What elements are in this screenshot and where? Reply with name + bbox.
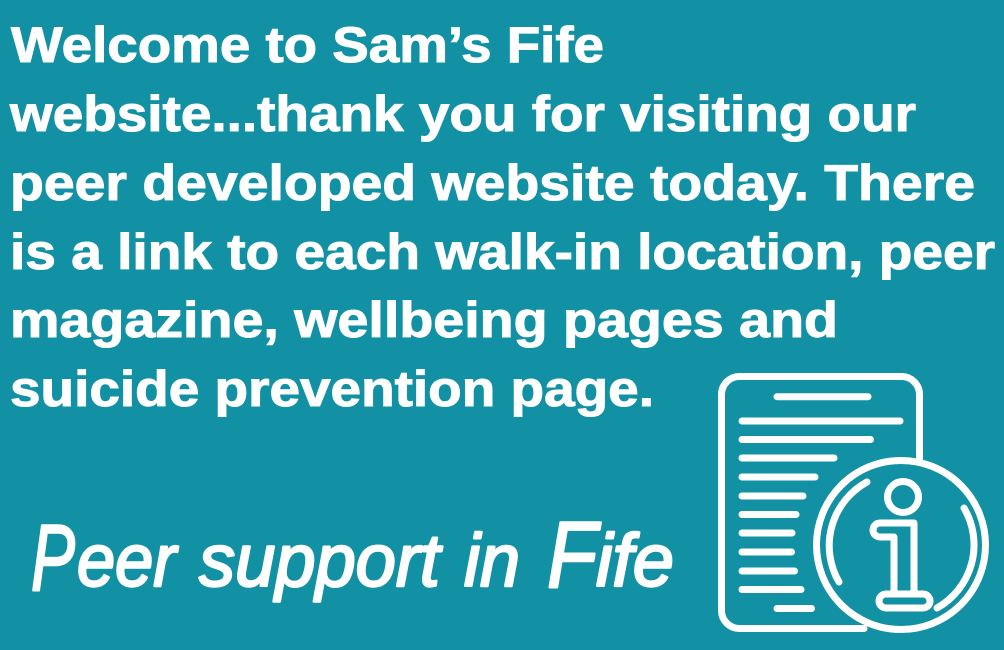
welcome message text block: peer developed website today. There [10, 155, 975, 211]
icon: document outline [722, 376, 920, 628]
icon: letter i dot [888, 482, 918, 512]
welcome message text block: Welcome to Sam’s Fife [11, 17, 604, 73]
icon: inner circle left arc [829, 482, 867, 582]
handwritten tagline [31, 502, 674, 610]
welcome message text block: is a link to each walk-in location, peer [10, 224, 995, 280]
icon: document text lines [742, 397, 900, 608]
icon: info circle [816, 460, 986, 630]
icon: inner circle right arc [937, 508, 974, 608]
handwritten tagline: P [31, 505, 75, 610]
handwritten tagline: support [199, 519, 443, 602]
welcome message text block: magazine, wellbeing pages and [10, 292, 838, 348]
handwritten tagline: in [464, 519, 520, 602]
handwritten tagline: ife [596, 519, 674, 602]
icon: information document [722, 376, 986, 630]
icon: letter i base [879, 594, 930, 608]
welcome message text block: suicide prevention page. [10, 361, 654, 417]
welcome message text block: website...thank you for visiting our [9, 86, 916, 142]
icon: letter i stem [873, 523, 914, 592]
handwritten tagline: eer [77, 519, 179, 602]
handwritten tagline: F [547, 502, 601, 607]
welcome message text block [9, 17, 995, 417]
